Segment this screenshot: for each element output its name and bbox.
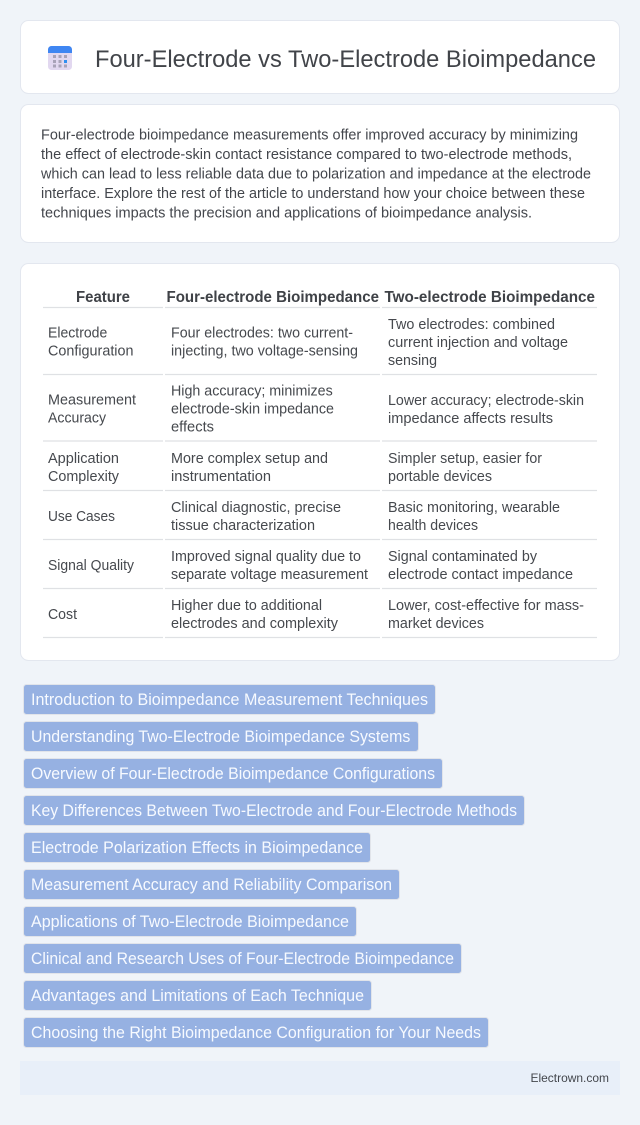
- table row: measurement accuracy: effects: [171, 420, 214, 436]
- table row: measurement accuracy: High accuracy; minimizes: [171, 384, 333, 400]
- table header row: Two-electrode Bioimpedance: [384, 289, 595, 306]
- table row: application complexity: instrumentation: [171, 469, 271, 485]
- table row: use cases: [48, 500, 560, 534]
- text block: intro paragraph: interface. Explore the rest of the article to understand how your choice between these: [41, 186, 585, 202]
- table header row: Four-electrode Bioimpedance: [166, 289, 379, 306]
- table row: electrode configuration: [48, 317, 568, 369]
- table row: application complexity: Complexity: [48, 469, 120, 485]
- table row: use cases: Clinical diagnostic, precise: [171, 500, 341, 516]
- table row: electrode configuration: injecting, two voltage-sensing: [171, 344, 358, 360]
- footer: Electrown.com: [530, 1071, 609, 1085]
- table row: signal quality: Signal contaminated by: [388, 549, 538, 565]
- text block: intro paragraph: [40, 127, 591, 221]
- table row: application complexity: portable devices: [388, 469, 492, 485]
- table row: electrode configuration: Two electrodes: combined: [388, 317, 555, 333]
- text block: intro paragraph: which can lead to less reliable data due to polarization and impedance at the electrode: [40, 166, 591, 182]
- table row: application complexity: [48, 451, 542, 485]
- table row: application complexity: Simpler setup, easier for: [388, 451, 542, 467]
- panel: title header: [20, 20, 620, 94]
- table row: cost: electrodes and complexity: [171, 616, 339, 632]
- table row: application complexity: Application: [48, 451, 119, 467]
- panel: introduction: [20, 104, 620, 242]
- table of contents buttons: Key Differences Between Two-Electrode and Four-Electrode Methods: [31, 802, 517, 820]
- table of contents buttons: Clinical and Research Uses of Four-Electrode Bioimpedance: [31, 950, 454, 968]
- table row: cost: Higher due to additional: [171, 598, 322, 614]
- table row: application complexity: More complex setup and: [171, 451, 328, 467]
- text block: intro paragraph: techniques impacts the precision and applications of bioimpedance analysis.: [41, 205, 532, 221]
- table row: electrode configuration: Configuration: [48, 344, 134, 360]
- table of contents buttons: Introduction to Bioimpedance Measurement Techniques: [31, 691, 428, 709]
- table of contents buttons: Choosing the Right Bioimpedance Configuration for Your Needs: [31, 1024, 481, 1042]
- footer: [20, 1061, 620, 1095]
- table row: measurement accuracy: Accuracy: [48, 411, 107, 427]
- panel: comparison table: [20, 264, 620, 660]
- table of contents buttons: Applications of Two-Electrode Bioimpedance: [31, 913, 349, 931]
- table row: measurement accuracy: electrode-skin impedance: [171, 402, 334, 418]
- table row: electrode configuration: sensing: [388, 353, 437, 369]
- table of contents buttons: Overview of Four-Electrode Bioimpedance Configurations: [31, 765, 435, 783]
- table row: use cases: tissue characterization: [171, 518, 315, 534]
- table row: signal quality: electrode contact impedance: [388, 567, 573, 583]
- table row: cost: [48, 598, 584, 632]
- table row: use cases: Use Cases: [48, 509, 115, 525]
- table row: electrode configuration: Electrode: [48, 326, 107, 342]
- table header row: Feature: [76, 289, 130, 306]
- text block: intro paragraph: Four-electrode bioimpedance measurements offer improved accuracy by minimizing: [41, 127, 578, 143]
- table of contents buttons: Measurement Accuracy and Reliability Comparison: [31, 876, 392, 894]
- table row: measurement accuracy: [48, 384, 584, 436]
- table row: signal quality: Improved signal quality due to: [171, 549, 361, 565]
- table row: use cases: health devices: [388, 518, 478, 534]
- table row: measurement accuracy: impedance affects results: [388, 411, 553, 427]
- table row: electrode configuration: current injection and voltage: [388, 335, 568, 351]
- table row: signal quality: [48, 549, 573, 583]
- table row: measurement accuracy: Measurement: [48, 393, 136, 409]
- table row: signal quality: separate voltage measurement: [171, 567, 368, 583]
- table of contents buttons: Understanding Two-Electrode Bioimpedance Systems: [31, 728, 410, 746]
- icon: calendar grid: [48, 46, 72, 70]
- text block: intro paragraph: the effect of electrode-skin contact resistance compared to two-electrode methods,: [41, 147, 572, 163]
- table row: signal quality: Signal Quality: [48, 558, 135, 574]
- table row: cost: Lower, cost-effective for mass-: [388, 598, 584, 614]
- table of contents buttons: Electrode Polarization Effects in Bioimpedance: [31, 839, 363, 857]
- table row: electrode configuration: Four electrodes: two current-: [171, 326, 353, 342]
- table row: use cases: Basic monitoring, wearable: [388, 500, 560, 516]
- table of contents buttons: Advantages and Limitations of Each Technique: [31, 987, 364, 1005]
- table header row: [76, 289, 595, 306]
- table row: cost: market devices: [388, 616, 484, 632]
- table row: measurement accuracy: Lower accuracy; electrode-skin: [388, 393, 584, 409]
- table of contents buttons: [24, 684, 524, 1048]
- table row: cost: Cost: [48, 607, 77, 623]
- title: Four-Electrode vs Two-Electrode Bioimpedance: [95, 46, 596, 73]
